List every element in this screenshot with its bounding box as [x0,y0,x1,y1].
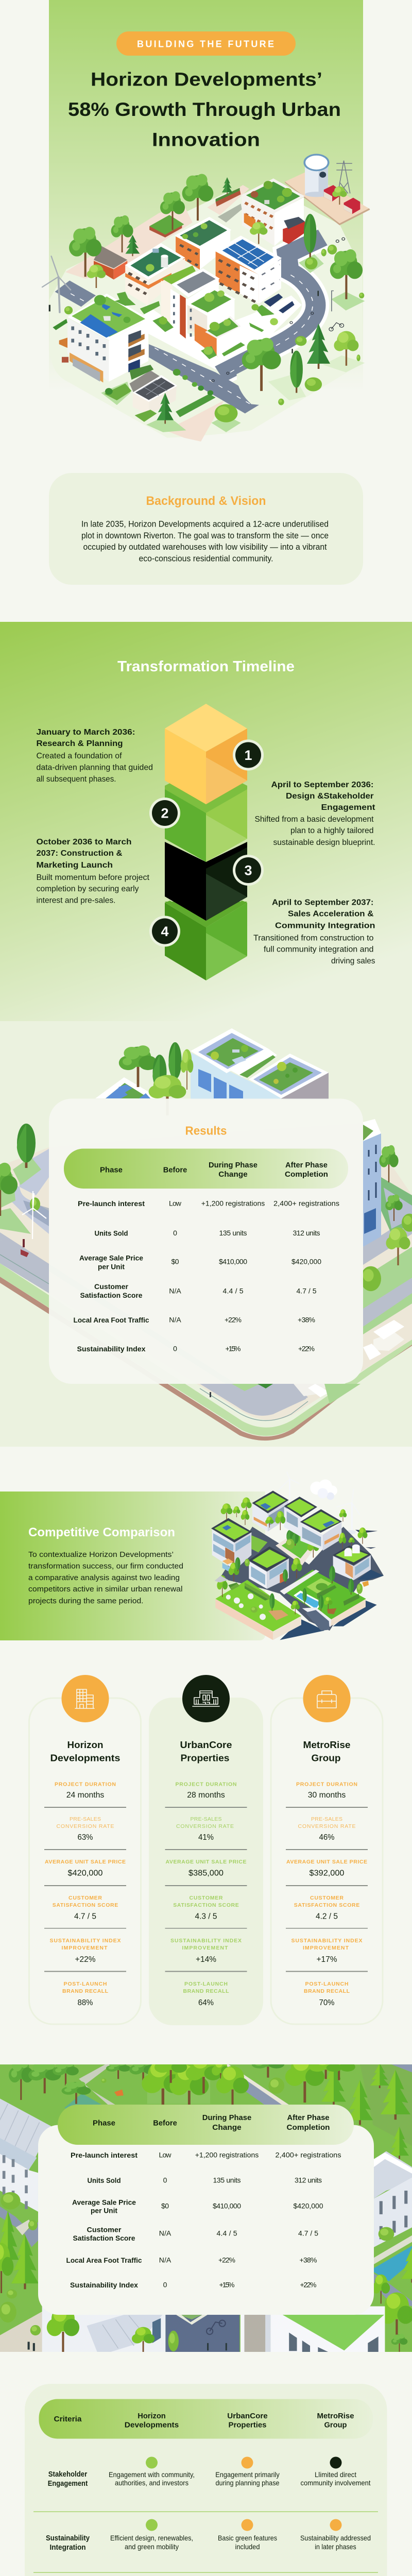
table rows: +15% [226,1345,241,1353]
step badges [149,740,264,947]
metrics [286,1782,368,2007]
intro paragraph: projects during the same period. [28,1597,143,1605]
icon: office building [62,1675,109,1722]
table header: Change [212,2123,242,2132]
metrics: 4.3 / 5 [195,1912,217,1921]
paragraph: In late 2035, Horizon Developments acquired a 12-acre underutilised [81,519,329,529]
table rows: 0 [173,1345,177,1353]
table header [58,2105,354,2145]
metrics: 63% [77,1833,93,1842]
aerial neighbourhood illustration [0,2054,412,2352]
table rows: $0 [161,2202,169,2210]
metrics [44,1782,126,2007]
table rows: +15% [219,2280,235,2289]
table rows: Pre-launch interest [78,1199,145,1208]
main block [191,1053,268,1100]
intro paragraph [28,1550,183,1605]
table rows: $410,000 [219,1257,247,1265]
metrics: POST-LAUNCH [184,1981,228,1987]
section: competitive comparison banner [0,1472,384,1640]
row: sustainability integration: Basic green features [218,2534,277,2542]
row: sustainability integration: and green mobility [125,2543,179,2551]
table rows: 2,400+ registrations [273,1199,339,1208]
metrics: $385,000 [188,1869,224,1877]
metrics: 64% [198,1998,214,2007]
metrics: AVERAGE UNIT SALE PRICE [166,1859,246,1865]
trees top row [9,2064,32,2100]
step 1 text [36,728,153,784]
table rows: N/A [169,1316,181,1324]
matrix header: UrbanCore [227,2412,268,2420]
metrics: SATISFACTION SCORE [294,1902,359,1908]
cube 3 [165,842,247,921]
metrics: CONVERSION RATE [57,1823,114,1829]
table rows: Pre-launch interest [71,2151,138,2159]
table header: Completion [285,1170,328,1179]
step 3 text: Marketing Launch [36,861,113,870]
table rows: Customer [94,1282,129,1291]
step 1 text: data-driven planning that guided [36,764,153,772]
name [180,1740,232,1763]
matrix header: Developments [125,2421,179,2430]
front left building [67,318,109,382]
table rows: 4.4 / 5 [216,2229,237,2237]
name: Group [311,1753,341,1763]
panel: background and vision [49,473,363,585]
table rows: Sustainability Index [70,2281,138,2289]
table header: During Phase [202,2113,251,2122]
right side buildings [374,2151,412,2198]
step 2 text: Engagement [321,803,375,812]
metrics: 88% [77,1998,93,2007]
metrics: SUSTAINABILITY INDEX [170,1938,242,1944]
upper left building [0,2098,51,2170]
step 2 text: April to September 2036: [271,781,374,789]
metrics: 70% [319,1998,335,2007]
step 3 text: completion by securing early [36,885,139,893]
step badges: 1 [244,748,252,763]
row: sustainability integration [46,2519,371,2552]
results card (second) [38,2105,374,2315]
table rows: Units Sold [88,2176,121,2184]
row: sustainability integration: in later phases [315,2543,356,2551]
planters around the block [115,292,274,359]
row: stakeholder engagement: authorities, and investors [115,2479,188,2487]
row: stakeholder engagement: community involvement [301,2479,371,2487]
step 2 text: plan to a highly tailored [290,826,374,835]
building top [252,1503,268,1532]
row: stakeholder engagement: during planning phase [215,2479,280,2487]
metrics: 30 months [308,1791,346,1800]
paragraph: eco-conscious residential community. [139,554,273,563]
metrics: PROJECT DURATION [296,1782,357,1788]
name: Horizon [67,1740,103,1750]
results card [49,1098,363,1384]
badge: building the future [116,31,296,56]
table rows: 4.7 / 5 [297,1287,317,1295]
street trees [221,1503,232,1520]
rear dark roof building [176,236,200,269]
card: MetroRise Group [271,1675,383,2024]
table rows [73,1199,339,1353]
metrics: +22% [75,1955,96,1964]
row: sustainability integration: included [235,2543,260,2551]
metrics: SUSTAINABILITY INDEX [291,1938,363,1944]
metrics: SUSTAINABILITY INDEX [49,1938,121,1944]
row: sustainability integration: Efficient design, renewables, [110,2534,193,2542]
metrics: 24 months [66,1791,104,1800]
table rows: Sustainability Index [77,1345,146,1353]
table rows: N/A [169,1287,181,1295]
step 3 text: interest and pre-sales. [36,896,115,905]
metrics: BRAND RECALL [183,1988,229,1994]
metrics: 41% [198,1833,214,1842]
metrics: AVERAGE UNIT SALE PRICE [45,1859,126,1865]
table rows: Local Area Foot Traffic [73,1316,149,1324]
intro paragraph: competitors active in similar urban renewal [28,1585,182,1594]
wind turbine [42,256,71,312]
stacked cube chart [149,704,264,980]
cyclists and people [212,238,345,382]
step 4 text: driving sales [331,957,375,965]
table header: Change [218,1170,248,1179]
row: sustainability integration: Sustainability [46,2534,90,2543]
table header: During Phase [209,1161,258,1170]
roads [220,1527,384,1631]
results illustration: isometric development site [0,1028,412,1440]
cube 2 [165,783,247,862]
metrics: CUSTOMER [190,1895,223,1901]
heading: Background & Vision [146,494,266,508]
solar tower [216,251,259,304]
metrics: SATISFACTION SCORE [173,1902,239,1908]
table rows: N/A [159,2256,171,2264]
table rows: per Unit [98,1262,125,1270]
table rows: $420,000 [291,1257,321,1265]
metrics: 46% [319,1833,335,1842]
step 1 text: Research & Planning [36,739,123,748]
trees [182,174,213,221]
table header: Phase [93,2119,115,2128]
metrics: PROJECT DURATION [175,1782,237,1788]
intro paragraph: To contextualize Horizon Developments’ [28,1550,174,1559]
back house [94,246,127,268]
illustration: isometric city block [211,1472,384,1640]
table rows: 0 [163,2176,167,2184]
table rows: Average Sale Price [72,2198,136,2206]
name [50,1740,121,1763]
step badges: 4 [161,924,169,939]
title: 58% Growth Through Urban [68,98,341,120]
table rows: +38% [298,1316,315,1324]
card: UrbanCore Properties [149,1675,263,2025]
metrics: PRE-SALES [70,1816,101,1822]
table rows: 4.4 / 5 [222,1287,244,1295]
table rows: $0 [171,1257,179,1265]
green roof mid building [125,265,148,306]
table rows: Low [169,1199,182,1208]
row: stakeholder engagement [48,2456,371,2488]
centre building block [161,280,173,329]
building d [300,1522,323,1550]
intro paragraph: a comparative analysis against two leading [28,1573,180,1582]
left side trees [0,2211,19,2260]
metrics: IMPROVEMENT [303,1945,349,1951]
metrics [165,1782,247,2007]
panel: qualitative criteria matrix [25,2384,387,2576]
step 1 text: Created a foundation of [36,752,122,760]
step 2 text [254,781,375,847]
step 1 text: January to March 2036: [36,728,135,737]
table rows [66,2150,341,2289]
step 2 text: Shifted from a basic development [254,815,374,824]
building lower [249,1561,267,1589]
metrics: $392,000 [309,1869,345,1877]
table rows: Average Sale Price [79,1254,143,1262]
table rows: $410,000 [213,2202,241,2210]
comparison cards [29,1675,383,2025]
table rows: Low [159,2150,171,2159]
section: transformation timeline [0,622,412,1021]
bottom strip [0,2311,42,2352]
step 2 text: sustainable design blueprint. [273,838,375,847]
metrics: +14% [196,1955,216,1964]
row: stakeholder engagement: Engagement with community, [109,2470,195,2479]
title: Horizon Developments’ [91,68,322,90]
step 4 text: April to September 2037: [272,899,374,907]
metrics: PRE-SALES [191,1816,221,1822]
paragraph: plot in downtown Riverton. The goal was to transform the site — once [81,531,329,540]
step 4 text: Community Integration [275,921,375,930]
metrics: $420,000 [68,1869,103,1877]
matrix header: Properties [229,2421,267,2430]
metrics: CONVERSION RATE [176,1823,234,1829]
matrix header: Horizon [138,2412,166,2420]
table header: Completion [286,2123,330,2132]
title [68,68,341,150]
matrix header [39,2399,373,2439]
icon: toolbox [303,1675,350,1722]
badge: building the future: BUILDING THE FUTURE [137,39,274,49]
matrix header: Group [324,2421,347,2430]
building middle [284,1507,301,1537]
name: Properties [180,1753,230,1763]
name [303,1740,350,1763]
matrix header: Criteria [54,2415,82,2424]
table rows: Satisfaction Score [80,1291,143,1299]
section: results [0,1021,412,1447]
table rows: +1,200 registrations [195,2150,259,2159]
table rows: +22% [298,1345,315,1353]
step 3 text [36,838,150,905]
table rows: +1,200 registrations [201,1199,265,1208]
table rows: Units Sold [95,1229,128,1238]
right island [331,1599,366,1626]
step 3 text: 2037: Construction & [36,849,123,858]
table header: Before [163,1165,187,1175]
table header: After Phase [287,2113,330,2122]
paragraph [81,519,329,563]
row: stakeholder engagement: Stakeholder [48,2470,88,2479]
table rows: 0 [163,2280,167,2289]
metrics: CUSTOMER [68,1895,102,1901]
metrics: CUSTOMER [310,1895,344,1901]
metrics: PRE-SALES [311,1816,342,1822]
step 4 text [253,899,375,965]
table header [64,1149,348,1189]
tank platform [285,181,370,225]
plaza [276,1538,314,1565]
table header: After Phase [285,1161,328,1170]
metrics: PROJECT DURATION [55,1782,116,1788]
table header: Phase [100,1165,123,1175]
name: MetroRise [303,1740,350,1750]
far planter [216,190,241,207]
paragraph: occupied by outdated warehouses with low visibility — into a vibrant [83,543,327,552]
hero gradient backdrop [49,0,363,392]
intro paragraph: transformation success, our firm conducted [28,1562,183,1570]
table rows: Satisfaction Score [73,2234,135,2242]
table rows: 2,400+ registrations [275,2150,341,2159]
heading: Competitive Comparison [28,1526,175,1539]
card: Horizon Developments [29,1675,141,2024]
hero panel [42,0,370,442]
metrics: IMPROVEMENT [182,1945,228,1951]
matrix header: MetroRise [317,2412,354,2420]
row: stakeholder engagement: Engagement primarily [215,2470,280,2479]
back tower with green roof [242,196,274,246]
cube 4 [165,901,247,980]
title: Innovation [152,129,260,150]
metrics: AVERAGE UNIT SALE PRICE [286,1859,367,1865]
metrics: POST-LAUNCH [305,1981,348,1987]
small solar house [129,370,176,393]
step 4 text: full community integration and [264,945,374,954]
name: Developments [50,1753,121,1763]
table rows: 0 [173,1229,177,1237]
table rows: 312 units [295,2176,322,2184]
step 3 text: Built momentum before project [36,873,150,882]
name: UrbanCore [180,1740,232,1750]
step badges: 3 [244,862,252,878]
table rows: 135 units [213,2176,241,2184]
row: sustainability integration: Sustainability addressed [300,2534,371,2542]
table rows: 135 units [219,1229,247,1237]
table rows: Customer [87,2226,122,2234]
table rows: +22% [300,2280,316,2289]
row: stakeholder engagement: Llimited direct [315,2470,356,2479]
metrics: CONVERSION RATE [298,1823,355,1829]
metrics: +17% [316,1955,337,1964]
row: stakeholder engagement: Engagement [48,2480,88,2488]
step 1 text: all subsequent phases. [36,775,116,784]
metrics: BRAND RECALL [62,1988,109,1994]
metrics: 28 months [187,1791,225,1800]
table header: Before [153,2119,177,2128]
table rows: N/A [159,2229,171,2237]
table rows: per Unit [91,2206,117,2214]
table rows: $420,000 [294,2202,323,2210]
results heading: Results [185,1124,227,1138]
left island [215,1599,273,1640]
hero illustration: isometric eco neighbourhood [42,155,370,442]
row: sustainability integration: Integration [49,2544,85,2552]
metrics: SATISFACTION SCORE [53,1902,118,1908]
cube 1 [165,704,247,804]
table rows: 4.7 / 5 [298,2229,318,2237]
table rows: +38% [300,2256,317,2264]
step badges: 2 [161,806,169,821]
metrics: BRAND RECALL [304,1988,350,1994]
table rows: +22% [225,1316,242,1324]
metrics: IMPROVEMENT [62,1945,108,1951]
table rows: +22% [218,2256,235,2264]
step 2 text: Design &Stakeholder [286,792,374,801]
table rows: Local Area Foot Traffic [66,2256,142,2264]
step 4 text: Transitioned from construction to [253,934,374,943]
metrics: POST-LAUNCH [64,1981,107,1987]
table rows: 312 units [293,1229,320,1237]
section: aerial image with results table [0,2054,412,2352]
step 3 text: October 2036 to March [36,838,132,846]
step 4 text: Sales Acceleration & [288,910,374,918]
building right [333,1556,354,1580]
icon: civic building [182,1675,230,1722]
building left [212,1529,234,1570]
timeline heading: Transformation Timeline [117,658,295,675]
road between islands [302,1607,331,1627]
metrics: 4.2 / 5 [316,1912,338,1921]
metrics: 4.7 / 5 [74,1912,96,1921]
